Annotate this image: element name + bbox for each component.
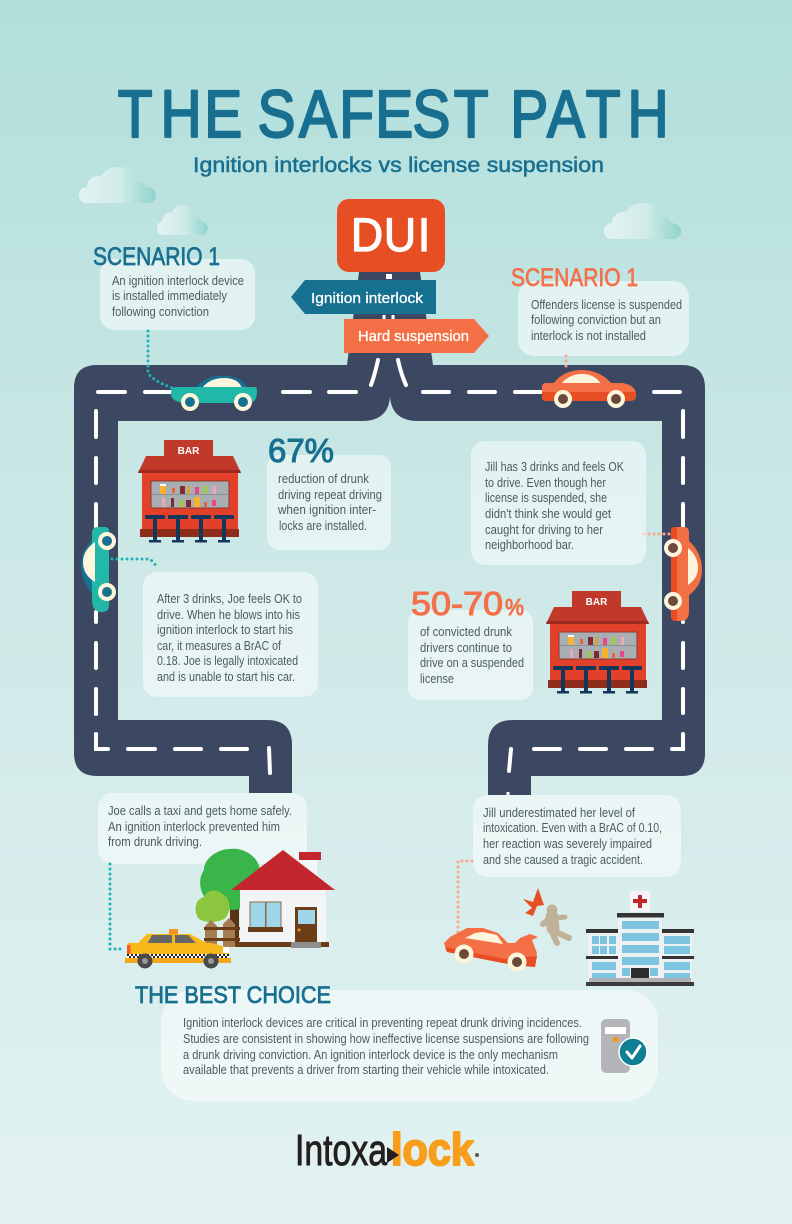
- text: 67 percent description: [277, 471, 382, 533]
- icon: bar right: BAR: [586, 597, 608, 608]
- text: 50-70 percent description: drivers continue to: [420, 640, 512, 655]
- title: THE SAFEST PATH: [118, 78, 669, 152]
- panel: Joe after 3 drinks: and is unable to start his car.: [157, 669, 295, 684]
- heading: scenario 1 left: SCENARIO 1: [93, 243, 220, 271]
- icon: orange car top: [542, 370, 636, 408]
- callout: 67 percent: [267, 432, 391, 550]
- connector: orange dots to crashed car: [458, 861, 472, 935]
- panel: Jill accident: intoxication. Even with a BrAC of 0.10,: [483, 820, 662, 835]
- panel: scenario right: [511, 264, 689, 356]
- subtitle: Ignition interlocks vs license suspension: [193, 154, 604, 177]
- icon: crashed car: [444, 928, 538, 972]
- sign: Hard suspension arrow: Hard suspension: [358, 328, 469, 345]
- connector: teal dots to top car: [148, 331, 175, 389]
- panel: Joe after 3 drinks: car, it measures a BrAC of: [157, 638, 281, 653]
- panel: Jill has 3 drinks: caught for driving to her: [485, 522, 604, 537]
- panel: Joe gets home: An ignition interlock prevented him: [108, 819, 280, 834]
- sign: DUI: DUI: [351, 209, 430, 261]
- logo: Intoxalock: [295, 1124, 479, 1175]
- logo: Intoxalock: lock: [391, 1124, 475, 1175]
- icon: house with trees: [196, 849, 335, 948]
- icon: orange car on right road: [664, 527, 702, 621]
- sign: Ignition interlock arrow: Ignition interlock: [311, 290, 424, 307]
- text: 67 percent description: when ignition inter-: [277, 502, 376, 517]
- panel: Joe after 3 drinks: drive. When he blows into his: [157, 607, 300, 622]
- icon: falling person: [543, 904, 569, 943]
- statistic: 50-70%: %: [505, 594, 524, 620]
- text: best choice body: Studies are consistent in showing how ineffective license suspensions are following: [183, 1031, 589, 1046]
- text: scenario right body: [531, 297, 682, 343]
- statistic: 67%: 67%: [268, 432, 334, 469]
- icon: impact burst: [523, 888, 544, 916]
- panel: Joe gets home: from drunk driving.: [108, 834, 202, 849]
- icon: cloud left small: [157, 205, 208, 235]
- text: scenario right body: Offenders license is suspended: [531, 297, 682, 312]
- panel: Joe gets home: Joe calls a taxi and gets home safely.: [108, 803, 292, 818]
- connector: teal dots to taxi: [110, 864, 124, 949]
- panel: Joe after 3 drinks: 0.18. Joe is legally intoxicated: [157, 653, 298, 668]
- icon: cloud left top: [79, 167, 156, 203]
- text: scenario left body: [112, 273, 244, 319]
- text: 50-70 percent description: drive on a suspended: [420, 655, 524, 670]
- text: 67 percent description: driving repeat driving: [278, 487, 382, 502]
- text: scenario left body: An ignition interlock device: [112, 273, 244, 288]
- connector: orange dots to Jill text: [644, 532, 672, 536]
- panel: scenario left: [93, 243, 255, 330]
- panel: Jill accident: her reaction was severely impaired: [483, 836, 652, 851]
- callout: 50-70 percent: [408, 585, 533, 700]
- text: scenario right body: interlock is not installed: [531, 328, 646, 343]
- panel: Joe after 3 drinks: ignition interlock to start his: [157, 622, 293, 637]
- text: best choice body: [183, 1015, 589, 1077]
- road network: [74, 272, 705, 795]
- text: best choice body: Ignition interlock devices are critical in preventing repeat drunk driving incidences.: [183, 1015, 582, 1030]
- icon: cloud right: [604, 203, 681, 239]
- heading: the best choice: THE BEST CHOICE: [135, 982, 331, 1009]
- text: 50-70 percent description: of convicted drunk: [420, 624, 512, 639]
- panel: Jill accident: [473, 795, 681, 877]
- sign: Hard suspension arrow: [344, 319, 489, 353]
- text: 50-70 percent description: [420, 624, 524, 686]
- icon: bar left: BAR: [178, 446, 200, 457]
- icon: bar right: [546, 591, 649, 694]
- panel: Jill has 3 drinks: didn't think she would get: [485, 506, 611, 521]
- sign: DUI: [337, 199, 445, 272]
- icon: teal car on left road: [81, 527, 116, 612]
- text: best choice body: a drunk driving conviction. An ignition interlock device is the only mechanism: [183, 1047, 558, 1062]
- icon: teal car top: [171, 376, 257, 411]
- panel: the best choice: [135, 982, 658, 1101]
- icon: taxi: [125, 929, 231, 968]
- text: 67 percent description: locks are installed.: [279, 518, 367, 533]
- text: 67 percent description: reduction of drunk: [278, 471, 369, 486]
- panel: Joe after 3 drinks: After 3 drinks, Joe feels OK to: [157, 591, 302, 606]
- connector: teal dots to Joe text: [112, 559, 157, 568]
- heading: scenario 1 right: SCENARIO 1: [511, 264, 638, 292]
- panel: Jill has 3 drinks: [471, 441, 646, 565]
- panel: Jill has 3 drinks: Jill has 3 drinks and feels OK: [485, 459, 624, 474]
- icon: bar left: [138, 440, 241, 542]
- text: scenario right body: following conviction but an: [531, 312, 661, 327]
- panel: Joe gets home: [98, 793, 307, 864]
- panel: Jill accident: Jill underestimated her level of: [483, 805, 635, 820]
- panel: Joe after 3 drinks: [143, 572, 318, 697]
- logo: Intoxalock: Intoxa: [295, 1126, 387, 1175]
- text: scenario left body: following conviction: [112, 304, 209, 319]
- icon: interlock device with check: [601, 1019, 647, 1073]
- sign: Ignition interlock arrow: [291, 280, 436, 314]
- text: scenario left body: is installed immediately: [112, 288, 227, 303]
- panel: Jill has 3 drinks: license is suspended, she: [485, 490, 607, 505]
- text: best choice body: available that prevents a driver from starting their vehicle while intoxicated.: [183, 1062, 549, 1077]
- panel: Jill has 3 drinks: to drive. Even though her: [485, 475, 607, 490]
- icon: hospital: [586, 891, 694, 986]
- panel: Jill has 3 drinks: neighborhood bar.: [485, 537, 574, 552]
- text: 50-70 percent description: license: [420, 671, 454, 686]
- statistic: 50-70%: 50-70: [411, 585, 503, 622]
- connector: orange dots to top car: [564, 356, 568, 369]
- panel: Jill accident: and she caused a tragic accident.: [483, 852, 643, 867]
